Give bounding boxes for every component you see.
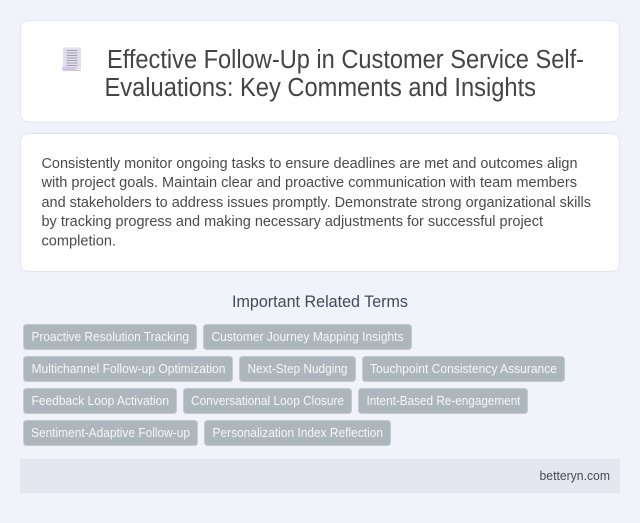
icon: document bbox=[62, 47, 81, 71]
tag: Customer Journey Mapping Insights bbox=[212, 329, 404, 344]
title: Effective Follow-Up in Customer Service Self- bbox=[107, 46, 584, 74]
title: Evaluations: Key Comments and Insights bbox=[104, 74, 536, 102]
description text: and stakeholders to address issues promptly. Demonstrate strong organizational skills bbox=[42, 195, 591, 211]
tag: Personalization Index Reflection bbox=[212, 425, 383, 440]
tag bbox=[24, 420, 198, 446]
description text: Consistently monitor ongoing tasks to ensure deadlines are met and outcomes align bbox=[42, 156, 578, 172]
description text bbox=[41, 156, 591, 250]
heading: important related terms: Important Related Terms bbox=[232, 293, 408, 311]
tag group: related terms bbox=[24, 324, 564, 446]
tag: Conversational Loop Closure bbox=[191, 393, 344, 408]
tag bbox=[24, 324, 196, 350]
tag bbox=[362, 356, 564, 382]
tag: Intent-Based Re-engagement bbox=[366, 393, 521, 408]
footer bbox=[20, 459, 620, 493]
tag bbox=[204, 420, 390, 446]
panel: header card bbox=[20, 20, 620, 122]
tag bbox=[240, 356, 356, 382]
tag: Proactive Resolution Tracking bbox=[32, 329, 189, 344]
footer brand: betteryn.com bbox=[540, 468, 610, 483]
description text: by tracking progress and making necessary adjustments for successful project bbox=[42, 214, 543, 230]
tag: Next-Step Nudging bbox=[248, 361, 348, 376]
tag: Touchpoint Consistency Assurance bbox=[370, 361, 557, 376]
panel: description card bbox=[20, 134, 620, 272]
tag bbox=[184, 388, 352, 414]
tag bbox=[24, 356, 232, 382]
title bbox=[104, 46, 584, 102]
description text: completion. bbox=[42, 234, 116, 250]
tag bbox=[358, 388, 528, 414]
description text: with project goals. Maintain clear and proactive communication with team members bbox=[41, 175, 577, 191]
tag: Feedback Loop Activation bbox=[32, 393, 169, 408]
tag bbox=[24, 388, 176, 414]
tag: Sentiment-Adaptive Follow-up bbox=[31, 425, 190, 440]
tag bbox=[204, 324, 412, 350]
tag: Multichannel Follow-up Optimization bbox=[32, 361, 226, 376]
